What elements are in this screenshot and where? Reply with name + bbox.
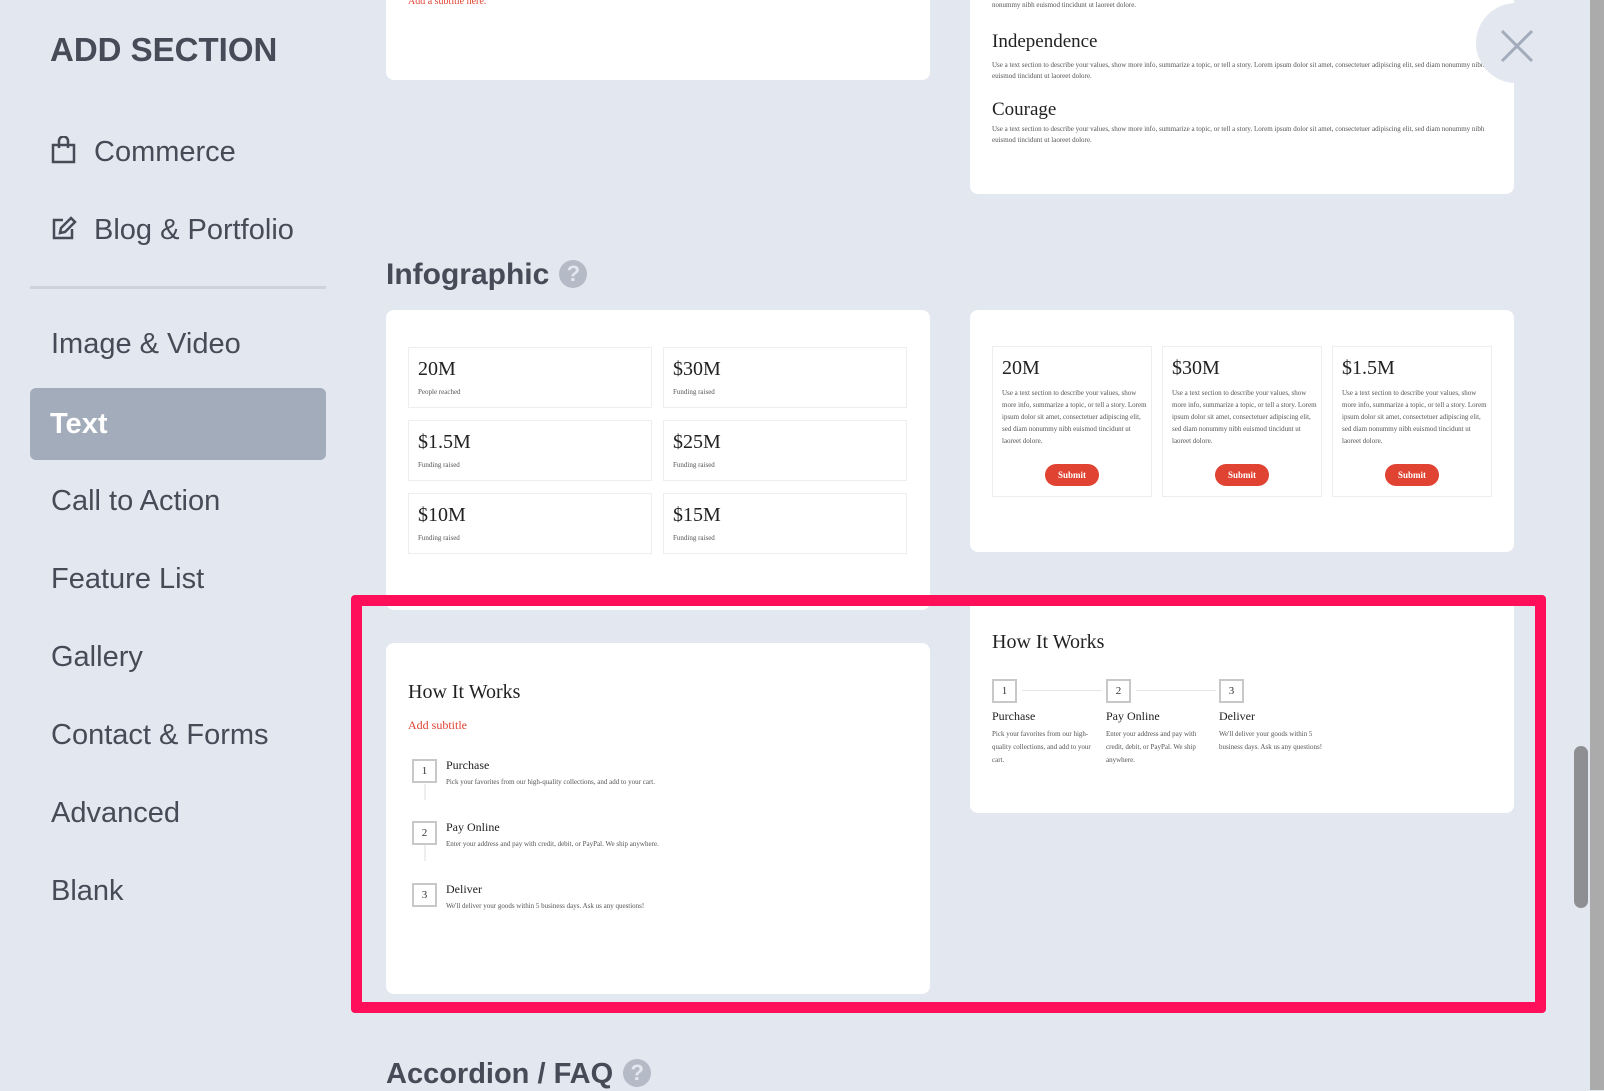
card: stats with buttons: Use a text section to describe your values, show more info, summarize a topic, or tell a story. Lorem ipsum dolor sit amet, consectetuer adipiscing elit, sed diam nonummy nibh euismod tincidunt ut laoreet dolore. <box>1172 389 1317 445</box>
card: how it works vertical: We'll deliver your goods within 5 business days. Ask us any questions! <box>446 902 644 910</box>
nav: advanced: Advanced <box>51 797 180 829</box>
heading: accordion: ? <box>630 1060 644 1085</box>
nav: feature list: Feature List <box>51 563 204 595</box>
nav: text selected <box>30 388 326 460</box>
nav: commerce: Commerce <box>94 136 236 168</box>
sidebar title: ADD SECTION <box>50 31 277 68</box>
card: stats with buttons: Submit <box>1398 470 1426 480</box>
heading: infographic: Infographic <box>386 258 549 291</box>
card: stats with buttons: Submit <box>1228 470 1256 480</box>
card: how it works horizontal: Pay Online <box>1106 709 1160 723</box>
card: how it works horizontal: 2 <box>1116 685 1121 697</box>
nav: blank: Blank <box>51 875 124 907</box>
nav: blog: Blog & Portfolio <box>94 214 294 246</box>
card: how it works vertical <box>386 643 930 994</box>
card: top right values: nonummy nibh euismod tincidunt ut laoreet dolore. <box>992 1 1136 9</box>
heading: infographic: ? <box>567 261 580 286</box>
card: how it works vertical: Purchase <box>446 758 489 772</box>
card: stats with buttons: 20M <box>1002 357 1040 379</box>
card: how it works vertical: Add subtitle <box>408 718 467 732</box>
card: how it works horizontal: Pick your favorites from our high-quality collections, and add to your cart. <box>992 730 1091 764</box>
card: how it works horizontal: 1 <box>1002 685 1007 697</box>
card: top right values <box>970 0 1514 194</box>
card: stats grid: $10M <box>418 504 466 526</box>
card: stats grid: Funding raised <box>418 534 460 542</box>
card: how it works vertical: Pick your favorites from our high-quality collections, and add to your cart. <box>446 778 655 786</box>
heading: accordion: Accordion / FAQ <box>386 1058 613 1090</box>
card: how it works vertical: 2 <box>422 827 427 839</box>
nav: gallery: Gallery <box>51 641 143 673</box>
card: stats grid: Funding raised <box>418 461 460 469</box>
card: stats grid: $30M <box>673 358 721 380</box>
card: stats grid: People reached <box>418 388 461 396</box>
card: stats with buttons <box>970 310 1514 552</box>
card: how it works vertical: Pay Online <box>446 820 500 834</box>
card: stats grid <box>386 310 930 610</box>
heading: independence: Independence <box>992 31 1098 52</box>
card: stats with buttons: Submit <box>1058 470 1086 480</box>
card: how it works vertical: Deliver <box>446 882 482 896</box>
nav: text selected: Text <box>50 408 107 440</box>
card: how it works horizontal: Enter your address and pay with credit, debit, or PayPal. We ship anywhere. <box>1106 730 1196 764</box>
card: how it works vertical: 1 <box>422 765 427 777</box>
card: stats with buttons: $30M <box>1172 357 1220 379</box>
card: how it works horizontal: How It Works <box>992 631 1104 653</box>
scrollbar <box>1590 0 1604 1090</box>
heading: courage: Courage <box>992 99 1056 120</box>
nav: image & video: Image & Video <box>51 328 241 360</box>
card: top right values: Use a text section to describe your values, show more info, summarize a topic, or tell a story. Lorem ipsum dolor sit amet, consectetuer adipiscing elit, sed diam nonummy nibh euismod tincidunt ut laoreet dolore. <box>992 61 1484 80</box>
card: how it works vertical: Enter your address and pay with credit, debit, or PayPal. We ship anywhere. <box>446 840 659 848</box>
nav: contact: Contact & Forms <box>51 719 269 751</box>
card: stats grid: Funding raised <box>673 461 715 469</box>
highlight frame <box>351 595 1546 1013</box>
card: top left <box>386 0 930 80</box>
card: stats grid: 20M <box>418 358 456 380</box>
close button <box>1476 3 1556 83</box>
card: stats grid: $25M <box>673 431 721 453</box>
card: stats grid: Funding raised <box>673 534 715 542</box>
card: stats grid: $1.5M <box>418 431 471 453</box>
card: stats with buttons: $1.5M <box>1342 357 1395 379</box>
card: stats with buttons: Use a text section to describe your values, show more info, summarize a topic, or tell a story. Lorem ipsum dolor sit amet, consectetuer adipiscing elit, sed diam nonummy nibh euismod tincidunt ut laoreet dolore. <box>1002 389 1147 445</box>
card: how it works vertical: 3 <box>422 889 427 901</box>
card: stats grid: $15M <box>673 504 721 526</box>
card: how it works vertical: How It Works <box>408 681 520 703</box>
card: how it works horizontal: 3 <box>1229 685 1234 697</box>
card: stats with buttons: Use a text section to describe your values, show more info, summarize a topic, or tell a story. Lorem ipsum dolor sit amet, consectetuer adipiscing elit, sed diam nonummy nibh euismod tincidunt ut laoreet dolore. <box>1342 389 1487 445</box>
card: how it works horizontal: Purchase <box>992 709 1035 723</box>
card: how it works horizontal: We'll deliver your goods within 5 business days. Ask us any questions! <box>1219 730 1322 751</box>
nav: call to action: Call to Action <box>51 485 220 517</box>
card: top right values: Use a text section to describe your values, show more info, summarize a topic, or tell a story. Lorem ipsum dolor sit amet, consectetuer adipiscing elit, sed diam nonummy nibh euismod tincidunt ut laoreet dolore. <box>992 125 1484 144</box>
card: how it works horizontal <box>970 598 1514 813</box>
card: how it works horizontal: Deliver <box>1219 709 1255 723</box>
card: stats grid: Funding raised <box>673 388 715 396</box>
